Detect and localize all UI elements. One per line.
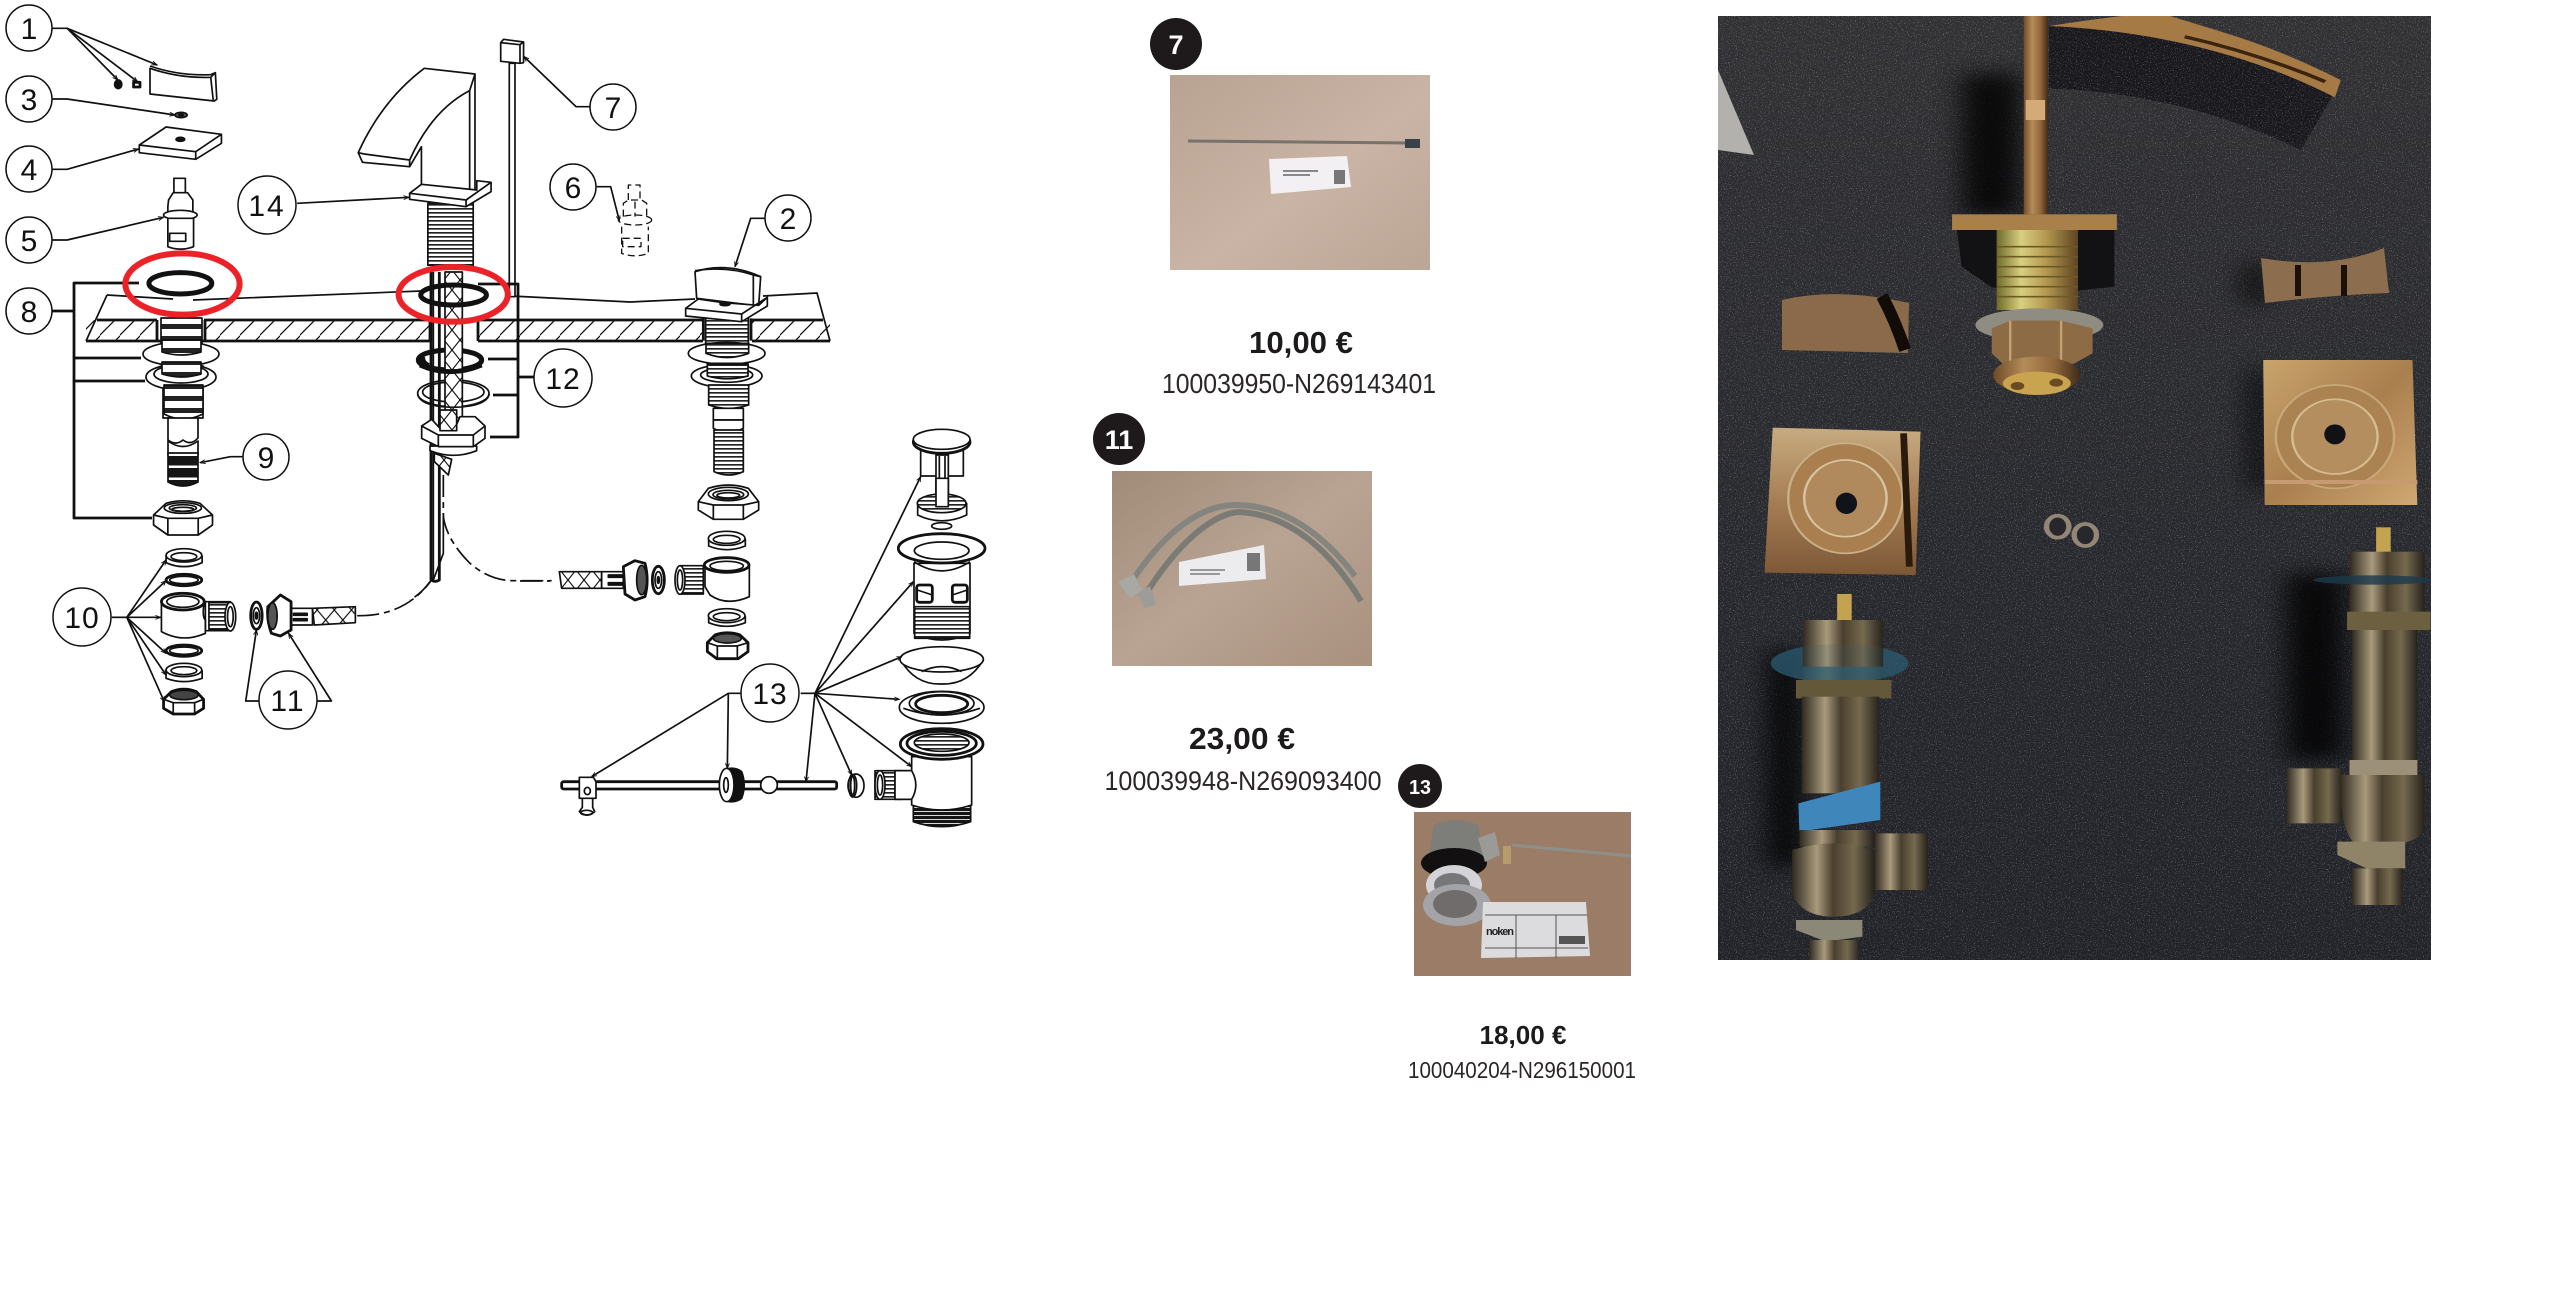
badge 7: 7 xyxy=(1168,30,1184,60)
callout 14 xyxy=(238,176,296,234)
callout 13: 13 xyxy=(752,678,788,711)
gold spout xyxy=(1952,16,2341,395)
callout 12: 12 xyxy=(545,363,581,396)
badge 7 xyxy=(1150,18,1202,70)
bracket lines for parts 8 and 12 xyxy=(52,283,534,518)
central riser: pipe, hose, seals and nut xyxy=(410,272,552,600)
foam speckle texture xyxy=(1718,16,2431,960)
callout 5 xyxy=(6,217,52,263)
reference 100039948-N269093400: 100039948-N269093400 xyxy=(1104,766,1382,796)
part 14: central spout xyxy=(358,68,491,265)
red highlight ellipse right xyxy=(399,267,508,322)
part 7: lift rod xyxy=(501,39,524,297)
part 2: right handle on right valve xyxy=(686,268,767,420)
callout 11: 11 xyxy=(270,685,306,718)
panel: photo of disassembled gold faucet on dark foam xyxy=(1718,16,2434,961)
panel: exploded faucet parts diagram xyxy=(6,5,985,827)
panel: part 11 spare xyxy=(1093,413,1382,796)
price 10,00 €: 10,00 € xyxy=(1249,325,1353,360)
brass washers xyxy=(2047,516,2096,546)
part 6: dashed alternate cartridge xyxy=(618,185,652,256)
callout 11 xyxy=(259,671,317,729)
right O-ring xyxy=(421,285,486,305)
part 3: small washer xyxy=(175,112,187,118)
callout 9: 9 xyxy=(258,442,274,475)
badge 13: 13 xyxy=(1409,777,1431,799)
panel: part 7 spare xyxy=(1150,18,1436,399)
callout 6: 6 xyxy=(565,172,581,205)
badge 11: 11 xyxy=(1105,425,1133,455)
price 18,00 €: 18,00 € xyxy=(1480,1020,1566,1050)
callout 5: 5 xyxy=(21,225,37,258)
badge 13 xyxy=(1398,764,1442,808)
right plate xyxy=(2263,360,2417,505)
left O-ring xyxy=(149,273,212,294)
dark reflective spout face xyxy=(2049,16,2341,150)
left valve assembly xyxy=(143,318,219,486)
paper corner xyxy=(1718,70,1754,155)
callout 14: 14 xyxy=(248,190,286,223)
callout 9 xyxy=(243,434,289,480)
right valve xyxy=(2286,527,2434,905)
countertop with hatched section xyxy=(86,291,830,341)
callout 12 xyxy=(534,349,592,407)
callout 3 xyxy=(6,76,52,122)
price 23,00 €: 23,00 € xyxy=(1189,721,1295,756)
reference 100040204-N296150001: 100040204-N296150001 xyxy=(1408,1057,1636,1083)
panel: part 13 spare xyxy=(1398,764,1636,1083)
part 4: square cover plate xyxy=(139,127,221,159)
callout 7 xyxy=(590,84,636,130)
photo: pop-up waste: noken xyxy=(1486,926,1514,938)
red highlight ellipse left xyxy=(125,253,240,315)
callout 10 xyxy=(53,588,111,646)
photo: lift rod xyxy=(1170,75,1430,270)
callout 2: 2 xyxy=(780,203,796,236)
right handle xyxy=(2261,248,2389,303)
part 13: pop-up drain assembly xyxy=(562,429,985,827)
left hex nut and fittings xyxy=(154,501,434,714)
left plate xyxy=(1764,428,1921,575)
callout numbers xyxy=(6,5,811,729)
part 1: handle and screws xyxy=(115,66,217,101)
callout 7: 7 xyxy=(605,92,621,125)
callout 13 xyxy=(741,664,799,722)
callout 1: 1 xyxy=(21,13,37,46)
badge 11 xyxy=(1093,413,1145,465)
callout 4: 4 xyxy=(21,154,37,187)
right valve body and connections xyxy=(520,420,759,659)
callout 8: 8 xyxy=(21,296,37,329)
O-ring seals highlighted in red xyxy=(125,253,508,322)
left handle xyxy=(1782,294,1909,353)
callout 4 xyxy=(6,146,52,192)
foam shadows xyxy=(1768,73,2345,867)
callout 8 xyxy=(6,288,52,334)
left valve xyxy=(1771,594,1928,961)
leader lines and arrows xyxy=(52,28,921,782)
reference 100039950-N269143401: 100039950-N269143401 xyxy=(1162,368,1436,399)
part 5: cartridge xyxy=(164,178,197,249)
callout 3: 3 xyxy=(21,84,37,117)
callout 1 xyxy=(6,5,52,51)
photo: pop-up waste xyxy=(1414,812,1631,976)
photo: braided hoses xyxy=(1112,471,1372,666)
washers and valves xyxy=(1771,516,2434,961)
callout 6 xyxy=(550,164,596,210)
callout 2 xyxy=(765,195,811,241)
callout 10: 10 xyxy=(64,602,100,635)
